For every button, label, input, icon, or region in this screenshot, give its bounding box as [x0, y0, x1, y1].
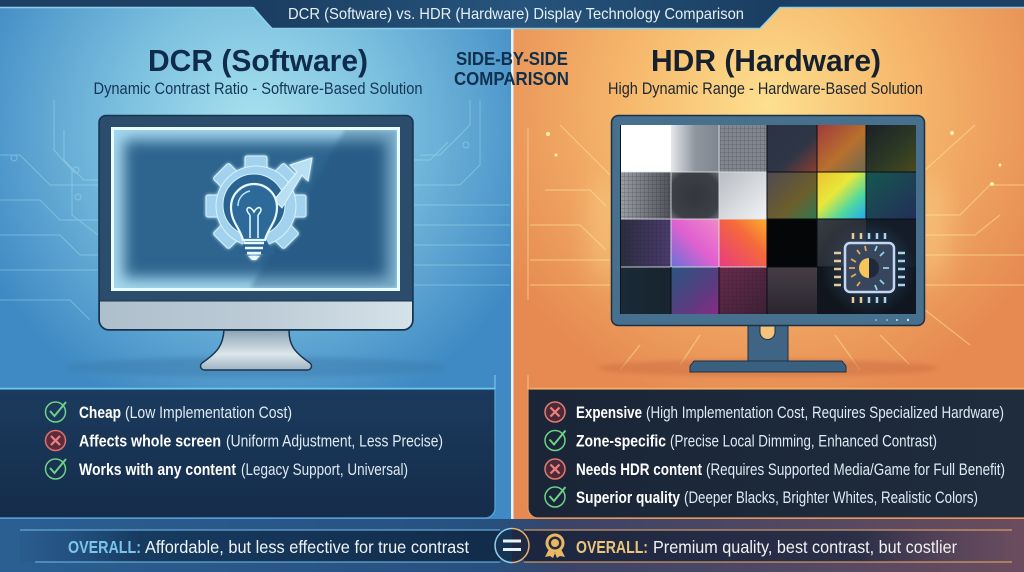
item: superior quality — [576, 488, 978, 507]
item: works with any content — [79, 460, 408, 479]
overall: HDR — [524, 530, 1012, 562]
item: cheap: Cheap — [79, 403, 121, 422]
item: superior quality: Superior quality — [576, 488, 680, 507]
item: works with any content: (Legacy Support, Universal) — [241, 460, 408, 479]
bottom band — [0, 519, 1024, 572]
header title: DCR (Software) vs. HDR (Hardware) Display Technology Comparison — [288, 6, 744, 23]
icon: HDR chip — [821, 220, 917, 316]
monitor body — [99, 116, 413, 330]
HDR monitor — [612, 116, 924, 372]
icon: gear, bulb and arrow — [206, 156, 312, 260]
panel: HDR pros and cons — [528, 375, 1024, 518]
monitor body — [612, 116, 924, 326]
icon: check — [545, 487, 566, 507]
HDR zones grid — [621, 125, 916, 314]
item: needs HDR content — [576, 460, 1005, 479]
monitor buttons — [875, 319, 909, 321]
item: cheap: (Low Implementation Cost) — [125, 403, 292, 422]
monitor stand — [690, 325, 846, 372]
center divider — [511, 29, 514, 529]
header banner — [0, 0, 1024, 28]
monitor stand — [201, 330, 311, 370]
icon: medal — [545, 534, 565, 558]
screen — [620, 125, 917, 316]
panel: DCR pros and cons — [0, 375, 495, 518]
item: needs HDR content: Needs HDR content — [576, 460, 702, 479]
heading: HDR — [608, 43, 923, 98]
monitor chin — [100, 301, 412, 330]
item: affects whole screen: Affects whole screen — [79, 432, 221, 450]
overall: DCR: OVERALL: — [68, 537, 141, 557]
heading: DCR: DCR (Software) — [148, 43, 368, 78]
heading: HDR: HDR (Hardware) — [651, 43, 881, 78]
subheading: HDR: High Dynamic Range - Hardware-Based Solution — [608, 79, 923, 98]
item: works with any content: Works with any content — [79, 460, 236, 479]
icon: cross — [545, 402, 565, 422]
item: cheap — [79, 403, 292, 422]
panel: HDR background — [512, 0, 1024, 530]
icon: cross — [545, 459, 565, 479]
icon: check — [545, 430, 566, 450]
overall: HDR: OVERALL: — [576, 537, 648, 557]
side-by-side label — [454, 49, 569, 89]
panel: DCR background — [0, 0, 512, 530]
icon: equals badge — [495, 528, 529, 562]
item: expensive: Expensive — [576, 403, 642, 422]
icon: check — [46, 459, 66, 479]
overall: DCR: Affordable, but less effective for true contrast — [145, 537, 469, 557]
item: zone-specific: Zone-specific — [576, 432, 666, 450]
DCR monitor — [99, 116, 413, 370]
heading: DCR — [94, 43, 422, 98]
item: affects whole screen: (Uniform Adjustment, Less Precise) — [226, 432, 443, 450]
side-by-side label: SIDE-BY-SIDE — [456, 49, 568, 69]
item: zone-specific: (Precise Local Dimming, Enhanced Contrast) — [670, 432, 937, 450]
icon: check — [46, 402, 66, 422]
overall: DCR — [20, 530, 500, 562]
item: zone-specific — [576, 432, 937, 450]
item: affects whole screen — [79, 432, 443, 450]
icon: cross — [46, 430, 66, 450]
side-by-side label: COMPARISON — [454, 69, 569, 89]
screen — [111, 127, 400, 291]
overall: HDR: Premium quality, best contrast, but costlier — [653, 537, 957, 557]
subheading: DCR: Dynamic Contrast Ratio - Software-Based Solution — [94, 79, 422, 98]
